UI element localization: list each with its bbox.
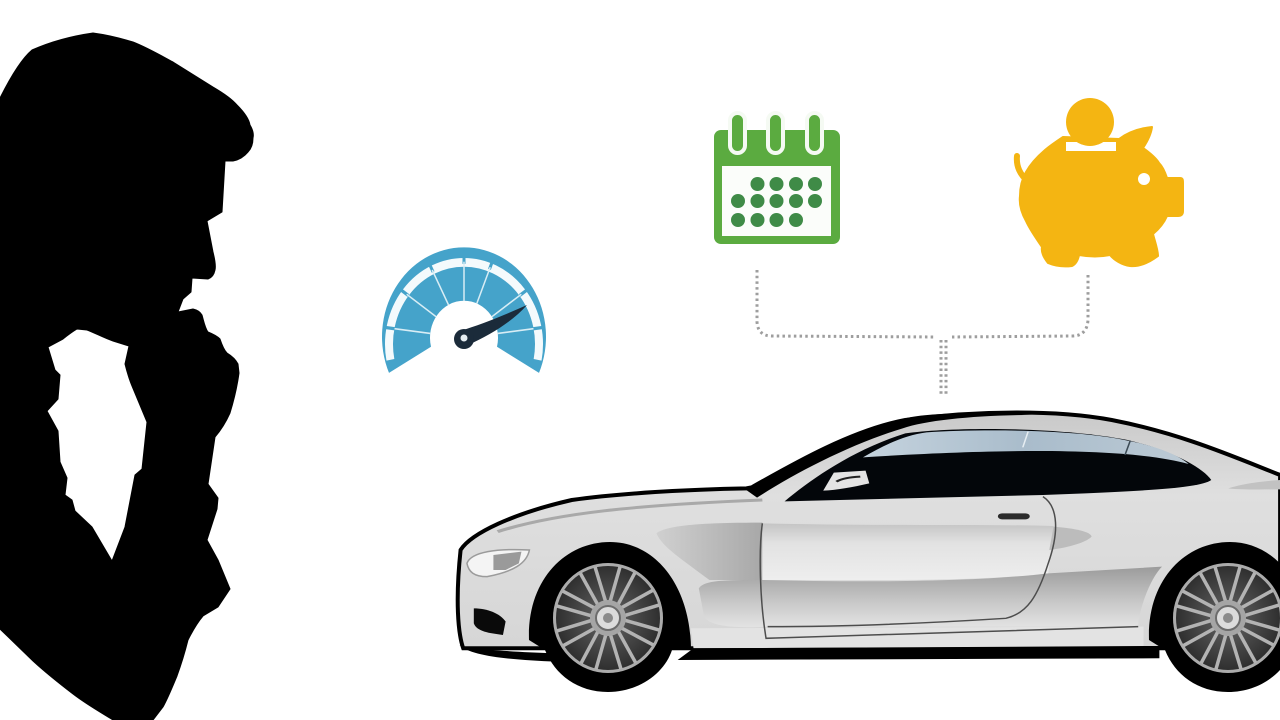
front wheel	[529, 542, 691, 692]
calendar page	[722, 166, 831, 236]
windshield pillar	[745, 413, 1032, 498]
pig coin lower	[1074, 134, 1107, 142]
pig coin slot	[1066, 142, 1116, 151]
headlight	[467, 550, 529, 577]
pig coin	[1066, 98, 1114, 146]
mirror slit	[836, 477, 860, 482]
gauge dial band	[382, 247, 546, 373]
icon: speedometer	[382, 247, 546, 373]
pig body	[1020, 127, 1183, 266]
front wheel arch and tyre	[529, 542, 691, 692]
rear rim	[1173, 563, 1280, 673]
silhouette: thinking man	[0, 33, 253, 720]
front scoop	[656, 523, 762, 580]
icon: calendar	[714, 113, 840, 244]
front air intake	[474, 608, 506, 635]
dotted connector	[757, 270, 1088, 395]
calendar date dots	[731, 177, 822, 227]
body shell	[458, 412, 1280, 648]
door panel	[762, 523, 1054, 580]
window pillar lines	[1023, 432, 1130, 455]
icon: piggy bank	[1017, 98, 1183, 266]
side window	[785, 429, 1211, 501]
front lower edge	[460, 645, 556, 662]
hood crease	[498, 500, 762, 532]
pig eye	[1138, 173, 1150, 185]
door handle	[998, 513, 1030, 519]
calendar rings	[730, 113, 822, 153]
lower body shade	[699, 567, 1162, 627]
headlight detail	[493, 552, 521, 570]
pig tail	[1017, 156, 1028, 181]
calendar frame	[714, 130, 840, 244]
window glass	[863, 430, 1189, 464]
door outline	[760, 497, 1138, 638]
rear wheel arch and tyre	[1149, 542, 1280, 692]
black sill	[678, 646, 1159, 660]
rear scoop tip	[1049, 527, 1092, 550]
car	[458, 412, 1280, 692]
rear wheel	[1149, 542, 1280, 692]
car body	[458, 412, 1280, 662]
sill highlight	[691, 627, 1144, 648]
gauge needle	[454, 305, 527, 349]
front rim	[553, 563, 663, 673]
rear fender shadow	[1228, 480, 1280, 489]
gauge white outer cells	[389, 262, 539, 360]
wing mirror	[823, 471, 869, 491]
